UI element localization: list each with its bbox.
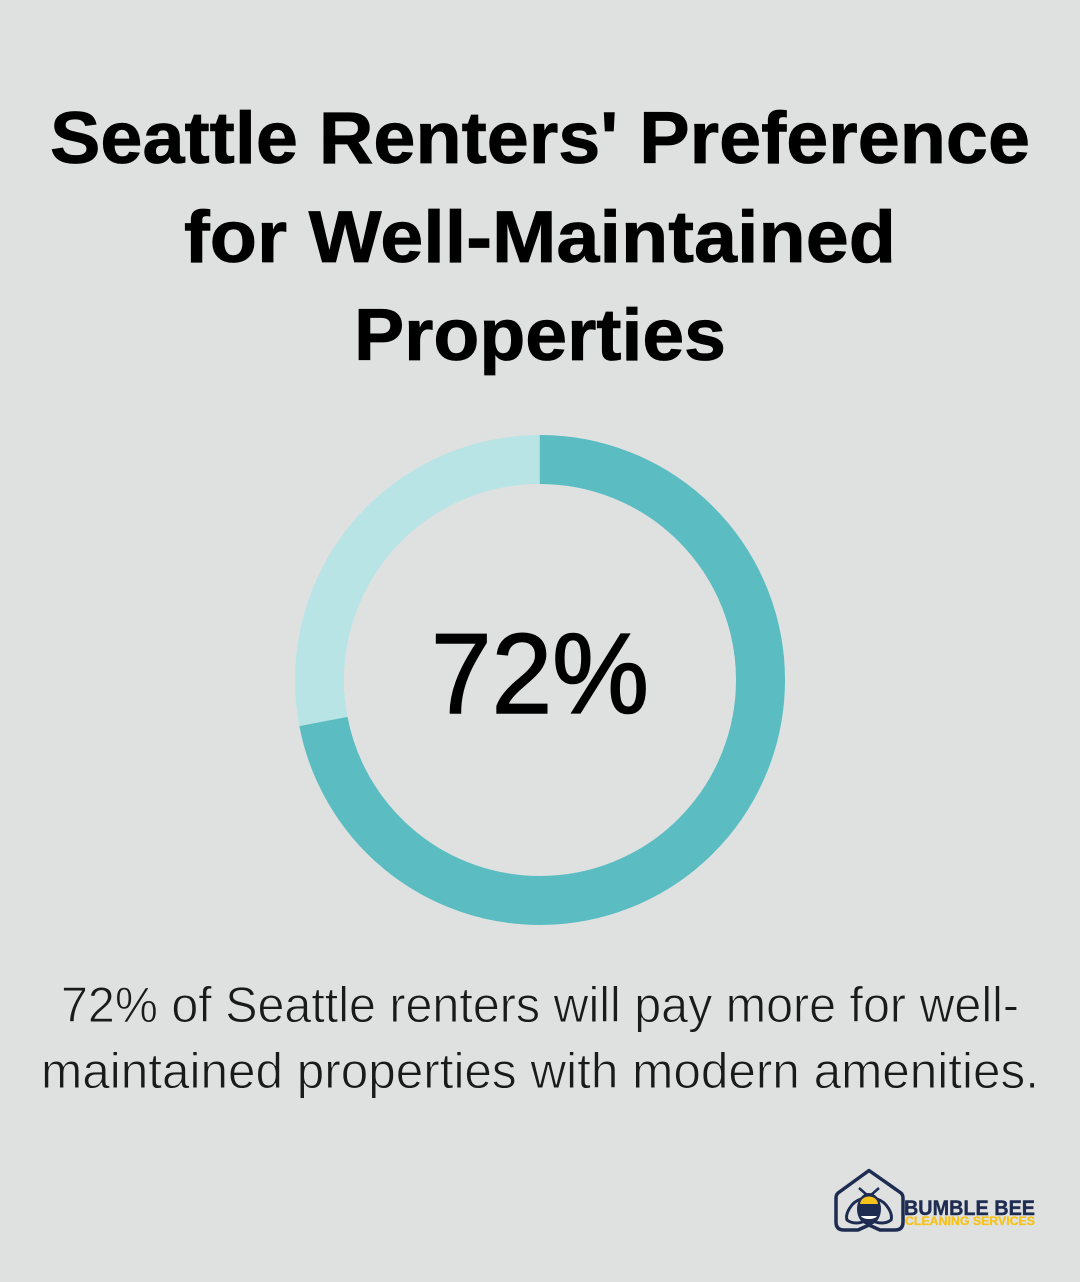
- donut chart: 72%: [320, 460, 760, 900]
- title: [50, 98, 1030, 376]
- logo tagline: CLEANING SERVICES: [905, 1214, 1035, 1228]
- icon: house outline with bee: [836, 1170, 903, 1230]
- description text: [41, 977, 1039, 1099]
- title: for Well-Maintained: [184, 197, 896, 278]
- logo name: BUMBLE BEE: [904, 1197, 1035, 1220]
- logo: Bumble Bee Cleaning Services: [836, 1170, 1035, 1230]
- donut value: 72%: [431, 611, 649, 738]
- title: Properties: [354, 295, 726, 376]
- title: Seattle Renters' Preference: [50, 98, 1030, 179]
- description text: 72% of Seattle renters will pay more for well-: [61, 977, 1019, 1033]
- description text: maintained properties with modern amenities.: [41, 1043, 1039, 1099]
